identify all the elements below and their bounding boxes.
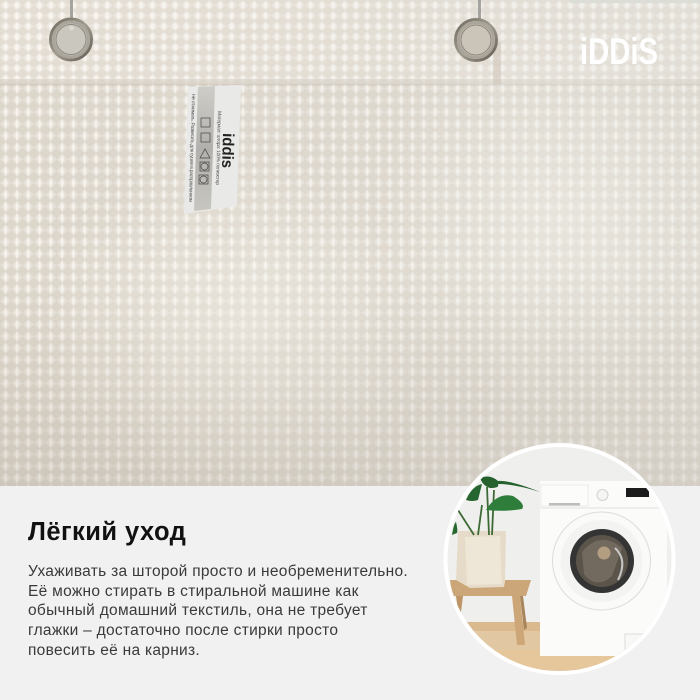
- care label sewn on curtain: iddis: [218, 133, 236, 168]
- body text: Ухаживать за шторой просто и необременительно.: [28, 563, 408, 580]
- washing machine: [540, 481, 667, 656]
- grey band with care icons: [194, 86, 215, 211]
- body text: обычный домашний текстиль, она не требует: [28, 602, 368, 619]
- care label sewn on curtain: Материал: штора: 100% полиэстер: [214, 111, 222, 185]
- floor: [473, 630, 646, 671]
- care label sewn on curtain: [184, 85, 241, 214]
- plant: [452, 477, 540, 535]
- canvas bag: [456, 531, 506, 588]
- body text: Её можно стирать в стиральной машине как: [28, 583, 359, 600]
- title: Лёгкий уход: [28, 518, 186, 546]
- iddis logo: iDDiS: [580, 31, 658, 72]
- body text: повесить её на карниз.: [28, 642, 200, 659]
- label text lines: Не отжимать. Развесить для сушки в расправленном: [187, 94, 196, 203]
- right grommet: [456, 0, 496, 60]
- grommets and hooks: [49, 0, 498, 62]
- washer door: [552, 512, 650, 610]
- body text: [28, 563, 408, 659]
- stool: [450, 580, 531, 645]
- left grommet: [50, 0, 92, 60]
- bottom text panel: [0, 486, 700, 700]
- iddis logo: ®: [657, 36, 661, 43]
- body text: глажки – достаточно после стирки просто: [28, 622, 338, 639]
- circular washing machine photo: [444, 443, 676, 675]
